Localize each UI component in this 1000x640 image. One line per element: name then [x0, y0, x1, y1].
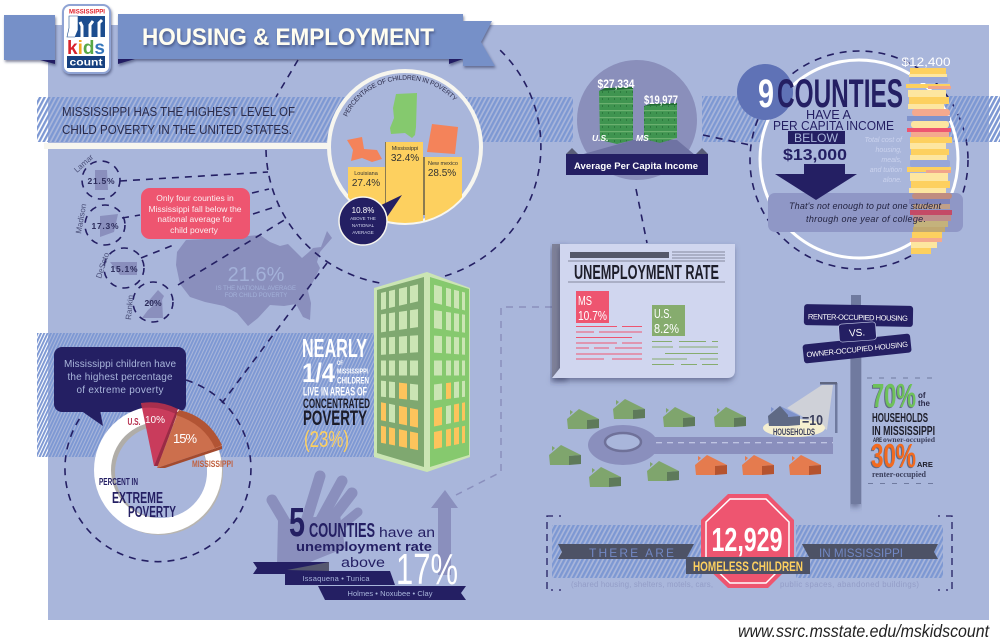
- callout: 10.8% above national average: AVERAGE: [352, 230, 374, 235]
- bar: US income stack: [599, 87, 633, 144]
- note: total cost: housing,: [876, 147, 902, 154]
- callout: extreme poverty: of extreme poverty: [76, 385, 164, 396]
- text: 9 counties per capita income: COUNTIES: [777, 72, 903, 116]
- bar: Mississippi: [386, 142, 423, 227]
- note: not enough for college: through one year of college.: [806, 214, 926, 224]
- logo: Mississippi Kids Count: count: [70, 58, 103, 68]
- county: DeSoto: [94, 251, 138, 280]
- callout: four counties below average: child poverty: [170, 225, 219, 235]
- note: total cost: alone.: [883, 177, 902, 184]
- 9 counties circle: [737, 51, 1000, 269]
- callout: 10.8% above national average: NATIONAL: [352, 223, 375, 228]
- callout: four counties below average: Mississippi fall below the: [148, 204, 242, 214]
- road and cul-de-sac: [588, 425, 833, 465]
- ribbons: county names: Issaquena • Tunica: [302, 574, 370, 583]
- text: 5 counties unemployment: above: [341, 555, 385, 570]
- stat: 70% and 30% households: of: [918, 391, 926, 400]
- newspaper: unemployment rate: [552, 244, 735, 378]
- stop sign: [701, 494, 794, 588]
- homeless panel: IN MISSISSIPPI: [819, 546, 903, 560]
- income circle: U.S.: [592, 133, 609, 143]
- label: percent in extreme poverty: EXTREME: [112, 490, 163, 507]
- note: total cost: [864, 137, 903, 184]
- text: 9 counties per capita income: BELOW: [794, 131, 839, 145]
- icon: Mississippi state: [390, 93, 417, 138]
- text: nearly 1/4 in concentrated poverty: 1/4: [302, 358, 335, 388]
- street lamp and light: [787, 382, 838, 433]
- building: [374, 272, 470, 472]
- label: percent in extreme poverty: [99, 477, 176, 521]
- bar: Mississippi: 32.4%: [391, 153, 419, 164]
- text: 5 counties unemployment: unemployment rate: [296, 539, 432, 554]
- poverty circle comparison: [327, 69, 483, 246]
- legend: one house equals 10 households: HOUSEHOLDS: [773, 427, 815, 438]
- signpost: [802, 295, 913, 504]
- county: Madison: Madison: [74, 203, 88, 234]
- text: 17%: 17%: [396, 545, 458, 594]
- stat: 70% and 30% households: HOUSEHOLDS: [872, 410, 928, 425]
- stat: 70% and 30% households: ARE: [917, 460, 933, 469]
- bar: Louisiana: Louisiana: [354, 171, 379, 177]
- homeless panel: THERE ARE: [589, 546, 674, 560]
- callout: 10.8% above national average: ABOVE THE: [350, 216, 376, 221]
- income circle: [566, 60, 708, 180]
- ring: percent in extreme poverty: [94, 406, 223, 535]
- callout: 10.8% above national average: 10.8%: [352, 206, 374, 215]
- callout: extreme poverty: Mississippi children have: [64, 359, 176, 370]
- note: not enough for college: [789, 201, 941, 224]
- county: Madison: [74, 203, 119, 237]
- bar: Louisiana: [348, 167, 385, 205]
- callout: four counties below average: national average for: [157, 214, 233, 224]
- text: nearly 1/4 in concentrated poverty: [302, 333, 370, 452]
- headline: highest child poverty: MISSISSIPPI HAS THE HIGHEST LEVEL OF: [62, 105, 295, 119]
- bar: MS income stack: [644, 103, 677, 143]
- ribbons: county names: Holmes • Noxubee • Clay: [348, 589, 433, 598]
- legend: one house equals 10 households: =10: [802, 412, 823, 429]
- bar: Mississippi: Mississippi: [392, 146, 418, 152]
- bar: New Mexico: New mexico: [428, 161, 458, 167]
- icon: raised arrow: [431, 490, 458, 575]
- title ribbon: [4, 14, 495, 66]
- sign: vs: VS.: [849, 327, 866, 340]
- title: HOUSING & EMPLOYMENT: [142, 24, 434, 51]
- text: nearly 1/4 in concentrated poverty: POVERTY: [303, 407, 367, 430]
- ribbon: there are: [558, 544, 694, 559]
- sign: owner-occupied: [802, 333, 912, 364]
- text: 5 counties unemployment: have an: [379, 525, 435, 540]
- income circle: $19,977: [644, 93, 678, 107]
- national average label: IS THE NATIONAL AVERAGE: [216, 286, 296, 292]
- ribbons: county names: [253, 562, 466, 600]
- pie: US 10%: [128, 402, 178, 466]
- text: nearly 1/4 in concentrated poverty: CHILDREN: [337, 376, 369, 386]
- income circle: MS: [636, 133, 649, 143]
- stat: 70% and 30% households: 70%: [871, 378, 915, 415]
- white divider: [44, 143, 334, 149]
- headline: highest child poverty: CHILD POVERTY IN THE UNITED STATES.: [62, 123, 292, 137]
- stat: 70% and 30% households: renter-occupied: [872, 470, 927, 479]
- national average label: 21.6%: [228, 264, 285, 286]
- icon: hand: [272, 476, 358, 565]
- county: Rankin: Rankin: [124, 295, 135, 320]
- stat: 70% and 30% households: 30%: [870, 438, 915, 475]
- homeless panel: HOMELESS CHILDREN: [693, 558, 803, 574]
- logo: Mississippi Kids Count: MISSISSIPPI: [69, 10, 105, 16]
- legend: one house equals 10 households: [763, 406, 825, 438]
- text: 5 counties unemployment: COUNTIES: [309, 520, 375, 542]
- icon: New Mexico state: [427, 124, 458, 154]
- pie: Mississippi 15%: [157, 410, 233, 470]
- headline: highest child poverty: [62, 105, 295, 137]
- pie: Mississippi 15%: 15%: [173, 431, 197, 446]
- houses: owner-occupied: [549, 399, 746, 487]
- county: Rankin: [124, 290, 164, 320]
- stat: 70% and 30% households: owner-occupied: [883, 435, 936, 444]
- text: nearly 1/4 in concentrated poverty: LIVE IN AREAS OF: [303, 384, 367, 398]
- text: 5 counties unemployment: 5: [289, 499, 305, 545]
- logo: Mississippi Kids Count: kids: [67, 38, 105, 59]
- icon: Louisiana state: [347, 137, 382, 162]
- poverty circle comparison: PERCENTAGE OF CHILDREN IN POVERTY: [343, 75, 458, 116]
- county: Lamar: 21.5%: [88, 176, 115, 186]
- callout: extreme poverty: the highest percentage: [68, 372, 173, 383]
- callout: 10.8% above national average: [339, 195, 402, 245]
- stat: US 8.2%: [652, 305, 685, 336]
- note: not enough for college: That's not enough to put one student: [789, 201, 941, 211]
- sign: vs: [838, 322, 877, 342]
- sign: renter-occupied: RENTER-OCCUPIED HOUSING: [808, 312, 908, 323]
- national average label: FOR CHILD POVERTY: [225, 293, 287, 299]
- label: percent in extreme poverty: PERCENT IN: [99, 477, 138, 488]
- national average label: [216, 264, 296, 299]
- hatched band: child poverty: [37, 96, 1000, 142]
- large dashed connector circles and lines: [65, 50, 750, 562]
- note: total cost: meals,: [881, 157, 902, 164]
- text: nearly 1/4 in concentrated poverty: (23%): [304, 426, 349, 452]
- county: DeSoto: DeSoto: [94, 251, 111, 280]
- county: Lamar: [72, 152, 115, 190]
- income circle: $27,334: [598, 77, 635, 91]
- bar: New Mexico: [425, 157, 462, 227]
- text: nearly 1/4 in concentrated poverty: CONCENTRATED: [303, 395, 370, 411]
- text: nearly 1/4 in concentrated poverty: NEARLY: [302, 333, 367, 363]
- stat: 70% and 30% households: ARE: [873, 437, 882, 444]
- note: total cost: and tuition: [870, 167, 902, 174]
- icon: down arrow: [775, 164, 857, 200]
- text: nearly 1/4 in concentrated poverty: OF: [337, 361, 343, 367]
- newspaper: unemployment rate: UNEMPLOYMENT RATE: [574, 262, 719, 284]
- homeless panel: [547, 494, 952, 590]
- stat: US 8.2%: 8.2%: [654, 321, 679, 336]
- income circle: Average Per Capita Income: [574, 161, 698, 172]
- county: Lamar: Lamar: [72, 152, 95, 174]
- text: nearly 1/4 in concentrated poverty: MISSISSIPPI: [337, 368, 368, 376]
- pie: Mississippi 15%: MISSISSIPPI: [192, 459, 233, 470]
- bar: Louisiana: 27.4%: [352, 178, 380, 189]
- hatched band: extreme poverty: [37, 333, 374, 457]
- stack of books: [906, 68, 952, 254]
- homeless panel: public spaces, abandoned buildings): [780, 580, 919, 589]
- pie: US 10%: U.S.: [128, 417, 141, 428]
- county: Madison: 17.3%: [92, 221, 119, 231]
- stop sign: 12,929: [712, 521, 782, 558]
- stat: 70% and 30% households: the: [918, 399, 931, 408]
- grey dashed connector: [456, 307, 552, 495]
- stat: US 8.2%: U.S.: [654, 306, 672, 321]
- stat: MS 10.7%: 10.7%: [578, 308, 607, 323]
- label: percent in extreme poverty: POVERTY: [128, 504, 176, 521]
- sign: owner-occupied: OWNER-OCCUPIED HOUSING: [806, 340, 909, 359]
- stat: 70% and 30% households: [867, 377, 940, 484]
- callout: extreme poverty: [54, 347, 186, 426]
- homeless panel: (shared housing, shelters, motels, cars,: [571, 580, 713, 589]
- stat: 70% and 30% households: 30%: [871, 437, 916, 474]
- text: 9 counties per capita income: [758, 72, 903, 200]
- callout: four counties below average: Only four counties in: [156, 193, 234, 203]
- houses: renter-occupied: [695, 455, 821, 475]
- text: 9 counties per capita income: 9: [758, 72, 774, 116]
- note: total cost: Total cost of: [864, 137, 903, 144]
- stat: MS 10.7%: [576, 291, 609, 323]
- stat: 70% and 30% households: IN MISSISSIPPI: [872, 423, 935, 438]
- logo: Mississippi Kids Count: [63, 5, 110, 73]
- bar: New Mexico: 28.5%: [428, 168, 456, 179]
- stat: MS 10.7%: MS: [578, 293, 592, 308]
- text: 5 counties unemployment: [289, 499, 435, 570]
- callout: four counties below average: [141, 188, 250, 239]
- text: 9 counties per capita income: PER CAPITA INCOME: [773, 118, 894, 133]
- label: $12,400: $12,400: [902, 55, 951, 69]
- ribbon: in Mississippi: [802, 544, 938, 559]
- text: 9 counties per capita income: $13,000: [783, 147, 847, 164]
- text: 9 counties per capita income: HAVE A: [806, 107, 851, 122]
- US map: [176, 231, 332, 326]
- sign: renter-occupied: [804, 304, 913, 327]
- county: Rankin: 20%: [144, 298, 162, 308]
- pie: US 10%: 10%: [145, 415, 165, 426]
- county: DeSoto: 15.1%: [110, 264, 138, 274]
- stat: 70% and 30% households: 70%: [872, 377, 916, 414]
